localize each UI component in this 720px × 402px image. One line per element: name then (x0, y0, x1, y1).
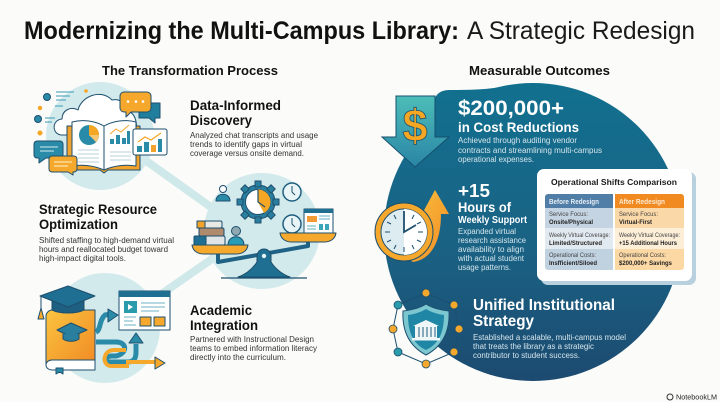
text block: academic integration: Integration (190, 318, 258, 333)
text block: data-informed discovery: Analyzed chat transcripts and usage (190, 131, 319, 140)
text block: strategic resource optimization: hours and reallocated budget toward (39, 245, 168, 254)
connector: discovery to optimization (145, 160, 215, 210)
text block: strategic resource optimization: Optimization (39, 217, 118, 232)
icon: orange speech bubble (120, 92, 151, 117)
text block: weekly support: with actual student (457, 254, 525, 263)
text block: academic integration (190, 303, 317, 362)
column: after redesign (615, 194, 684, 270)
text block: cost reductions: contracts and streamlining multi-campus (458, 146, 602, 155)
table title: Operational Shifts Comparison (551, 177, 677, 187)
text block: data-informed discovery: coverage versus onsite demand. (190, 149, 304, 158)
text block: academic integration: directly into the curriculum. (190, 353, 286, 362)
column: before redesign: Weekly Virtual Coverage: (549, 233, 610, 239)
text block: cost reductions: $200,000+ (458, 97, 564, 120)
text block: academic integration: teams to embed information literacy (190, 344, 317, 353)
text block: weekly support: availability to align (458, 245, 524, 254)
icon: right scale pan clock (283, 215, 301, 233)
column: before redesign: Service Focus: (549, 212, 588, 218)
text block: unified institutional strategy: Strategy (473, 313, 534, 330)
panel: measurable outcomes circle (384, 83, 682, 381)
text block: data-informed discovery: Discovery (190, 113, 252, 128)
icon: down arrow with dollar (382, 96, 449, 167)
text block: weekly support: Hours of (458, 200, 511, 215)
icon: orange book (46, 310, 95, 374)
text block: unified institutional strategy (473, 297, 626, 360)
watermark: NotebookLM: NotebookLM (676, 392, 717, 402)
icon: data nodes (34, 89, 88, 136)
column: after redesign: Weekly Virtual Coverage: (619, 233, 680, 239)
column: after redesign: +15 Additional Hours (619, 240, 677, 247)
text block: unified institutional strategy: contributor to student success. (473, 351, 580, 360)
text block: cost reductions: in Cost Reductions (458, 119, 579, 135)
icon: browser window (304, 209, 333, 233)
icon: curved arrows (96, 314, 156, 366)
column: before redesign: Operational Costs: (549, 253, 596, 259)
column: after redesign: After Redesign (619, 199, 665, 206)
panel: operational shifts comparison (537, 169, 696, 285)
text block: strategic resource optimization (39, 202, 174, 263)
icon: left teal chat (34, 141, 63, 163)
title (24, 17, 695, 45)
text block: data-informed discovery: trends to identify gaps in virtual (190, 140, 302, 149)
text block: weekly support: +15 (458, 181, 490, 201)
text block: unified institutional strategy: that treats the library as a strategic (473, 342, 594, 351)
icon: person on scale (228, 226, 244, 245)
heading: the transformation process: The Transformation Process (102, 64, 278, 78)
text block: cost reductions: operational expenses. (458, 155, 534, 164)
column: before redesign: Insfficient/Siloed (549, 260, 597, 267)
icon: shield with network (389, 289, 463, 368)
text block: weekly support: usage patterns. (458, 263, 511, 272)
column: before redesign: Limited/Structured (549, 240, 602, 247)
icon: clock with up arrow (375, 190, 449, 262)
column: after redesign: Service Focus: (619, 212, 658, 218)
text block: unified institutional strategy: Established a scalable, multi-campus model (473, 333, 626, 342)
text block: weekly support: research assistance (458, 236, 527, 245)
column: after redesign: Virtual-First (619, 219, 653, 226)
text block: academic integration: Partnered with Instructional Design (190, 335, 314, 344)
column: after redesign: $200,000+ Savings (619, 260, 672, 267)
icon: upper clock (283, 183, 301, 201)
icon: chart card (133, 129, 167, 155)
icon: graduation cap (38, 286, 95, 319)
text block: unified institutional strategy: Unified Institutional (473, 297, 615, 314)
text block: weekly support: Weekly Support (458, 215, 528, 226)
title: Modernizing the Multi-Campus Library: (24, 17, 459, 45)
icon: arrowheads (108, 309, 165, 369)
icon: book stack (194, 221, 225, 245)
icon: gear with clock (237, 181, 279, 223)
icon: browser window (119, 291, 170, 330)
text block: cost reductions: Achieved through auditing vendor (458, 136, 577, 145)
text block: data-informed discovery (190, 98, 319, 158)
text block: weekly support: Expanded virtual (458, 227, 516, 236)
panel: data-informed discovery icon (34, 82, 167, 190)
icon: open book (67, 121, 140, 173)
text block: data-informed discovery: Data-Informed (190, 98, 281, 113)
panel: academic integration icon (38, 273, 170, 383)
text block: weekly support (457, 181, 528, 272)
icon: small person (216, 186, 230, 201)
title: A Strategic Redesign (467, 17, 695, 45)
icon: cloud (54, 94, 137, 135)
column: before redesign: Onsite/Physical (549, 219, 593, 226)
column: after redesign: Operational Costs: (619, 253, 666, 259)
icon: left orange chat (49, 156, 77, 175)
text block: academic integration: Academic (190, 303, 252, 318)
icon: scale (192, 233, 336, 278)
connector: optimization to integration (160, 252, 222, 295)
text block: strategic resource optimization: Strategic Resource (39, 202, 157, 217)
icon: teal speech bubble (139, 103, 160, 123)
text block: cost reductions (458, 97, 602, 164)
heading: measurable outcomes: Measurable Outcomes (469, 64, 610, 78)
column: before redesign (545, 194, 613, 270)
panel: strategic resource optimization icon (192, 173, 336, 289)
column: before redesign: Before Redesign (549, 199, 599, 206)
text block: strategic resource optimization: Shifted staffing to high-demand virtual (39, 236, 174, 245)
text block: strategic resource optimization: high-impact digital tools. (39, 254, 126, 263)
icon: down arrow with dollar: $ (402, 100, 428, 151)
